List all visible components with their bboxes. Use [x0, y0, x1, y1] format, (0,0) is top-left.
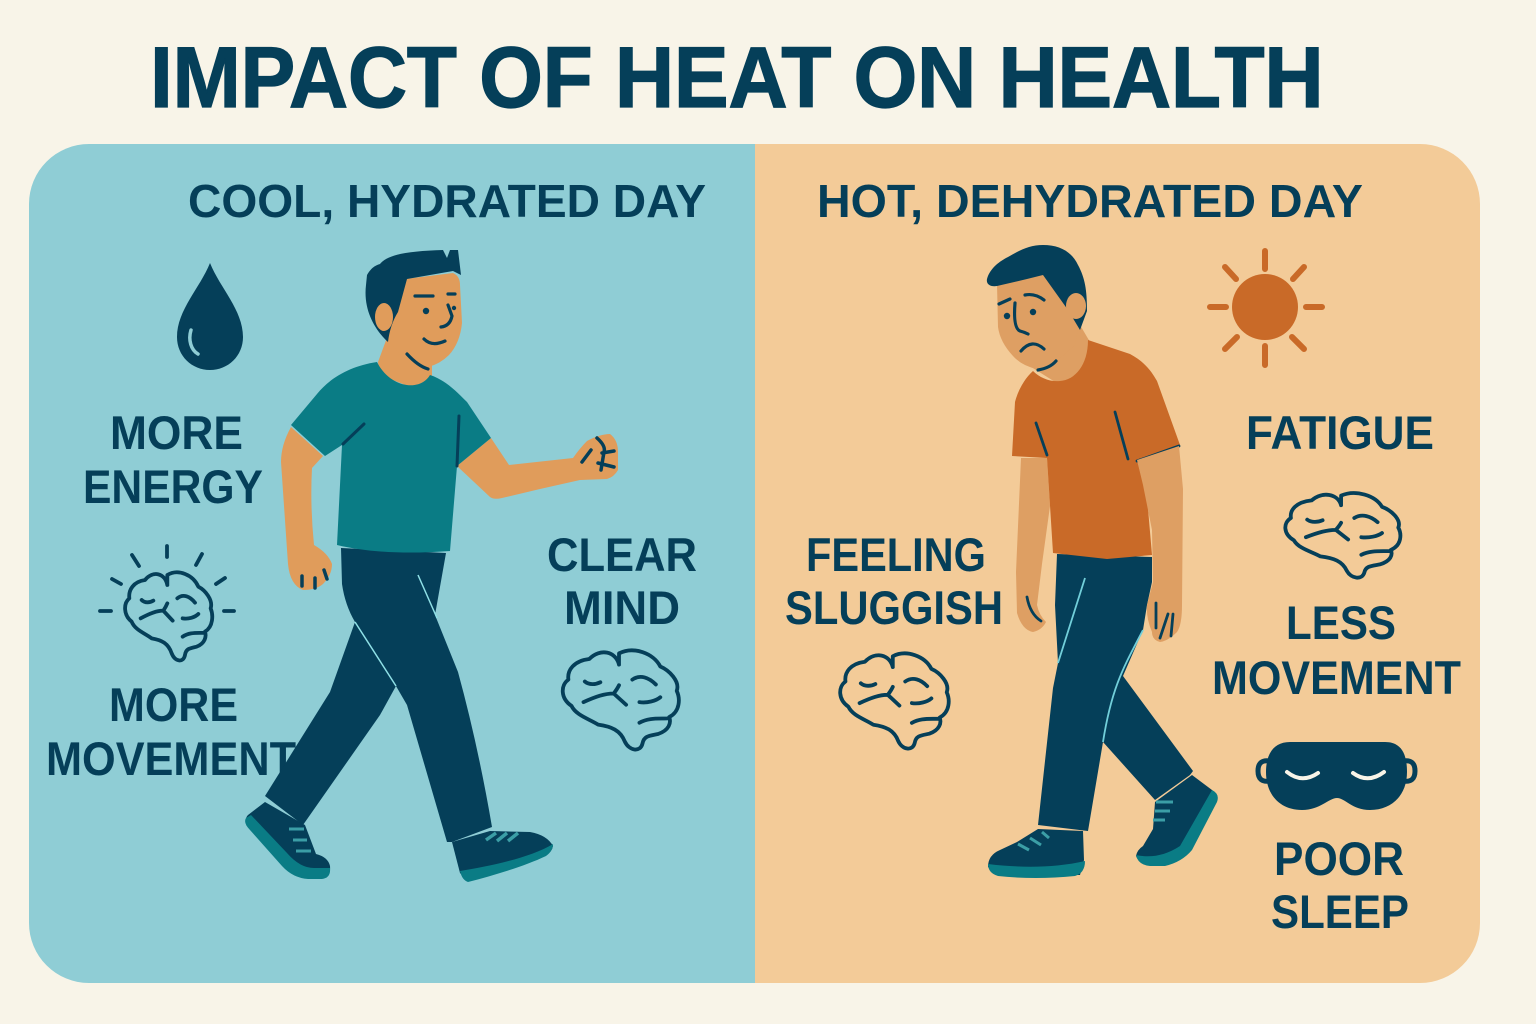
heading: hot day: HOT, DEHYDRATED DAY: [817, 175, 1363, 227]
icon: brain clear mind: [563, 650, 679, 750]
label: clear mind: [547, 528, 697, 634]
trousers: [1038, 554, 1193, 831]
icon: brain fatigue: [1285, 493, 1400, 578]
label: fatigue: FATIGUE: [1246, 406, 1434, 459]
icon: sun: [1210, 251, 1322, 365]
head: [987, 245, 1087, 370]
front shoe: [988, 829, 1085, 878]
label: poor sleep: [1271, 832, 1409, 938]
icon: brain sluggish: [840, 653, 949, 749]
label: more energy: [83, 406, 263, 513]
icon: brain with sparks: [100, 546, 234, 660]
label: more movement: MOVEMENT: [46, 732, 296, 785]
trousers: [265, 548, 492, 842]
neck: [1020, 325, 1090, 385]
label: feeling sluggish: SLUGGISH: [785, 581, 1003, 634]
back shoe: [1136, 775, 1218, 866]
label: more movement: MORE: [109, 678, 238, 731]
label: feeling sluggish: FEELING: [806, 528, 986, 581]
heading: cool day: COOL, HYDRATED DAY: [188, 175, 706, 227]
front arm: [457, 434, 618, 499]
panel: hot, dehydrated day: [755, 144, 1480, 983]
label: less movement: LESS: [1286, 596, 1396, 649]
icon: sleep mask: [1258, 742, 1415, 810]
label: more energy: MORE: [110, 406, 243, 459]
back shoe: [245, 802, 330, 879]
front shoe: [452, 831, 553, 882]
label: poor sleep: SLEEP: [1271, 885, 1409, 938]
label: clear mind: CLEAR: [547, 528, 697, 581]
label: less movement: MOVEMENT: [1212, 651, 1461, 704]
label: less movement: [1212, 596, 1461, 704]
shirt: [291, 362, 491, 553]
rear arm: [281, 427, 332, 590]
label: feeling sluggish: [785, 528, 1003, 634]
shirt: [1012, 340, 1180, 559]
neck: [378, 335, 432, 388]
panel: cool, hydrated day: [29, 144, 755, 983]
head: [366, 250, 462, 369]
left arm: [1016, 458, 1050, 632]
right arm: [1137, 446, 1183, 642]
label: poor sleep: POOR: [1274, 832, 1404, 885]
figure: walking man: [245, 250, 618, 882]
title: IMPACT OF HEAT ON HEALTH: [150, 29, 1327, 125]
label: more energy: ENERGY: [83, 460, 263, 513]
label: clear mind: MIND: [564, 581, 680, 634]
label: more movement: [46, 678, 296, 785]
figure: slumped man: [987, 245, 1218, 878]
icon: water drop: [177, 263, 243, 370]
